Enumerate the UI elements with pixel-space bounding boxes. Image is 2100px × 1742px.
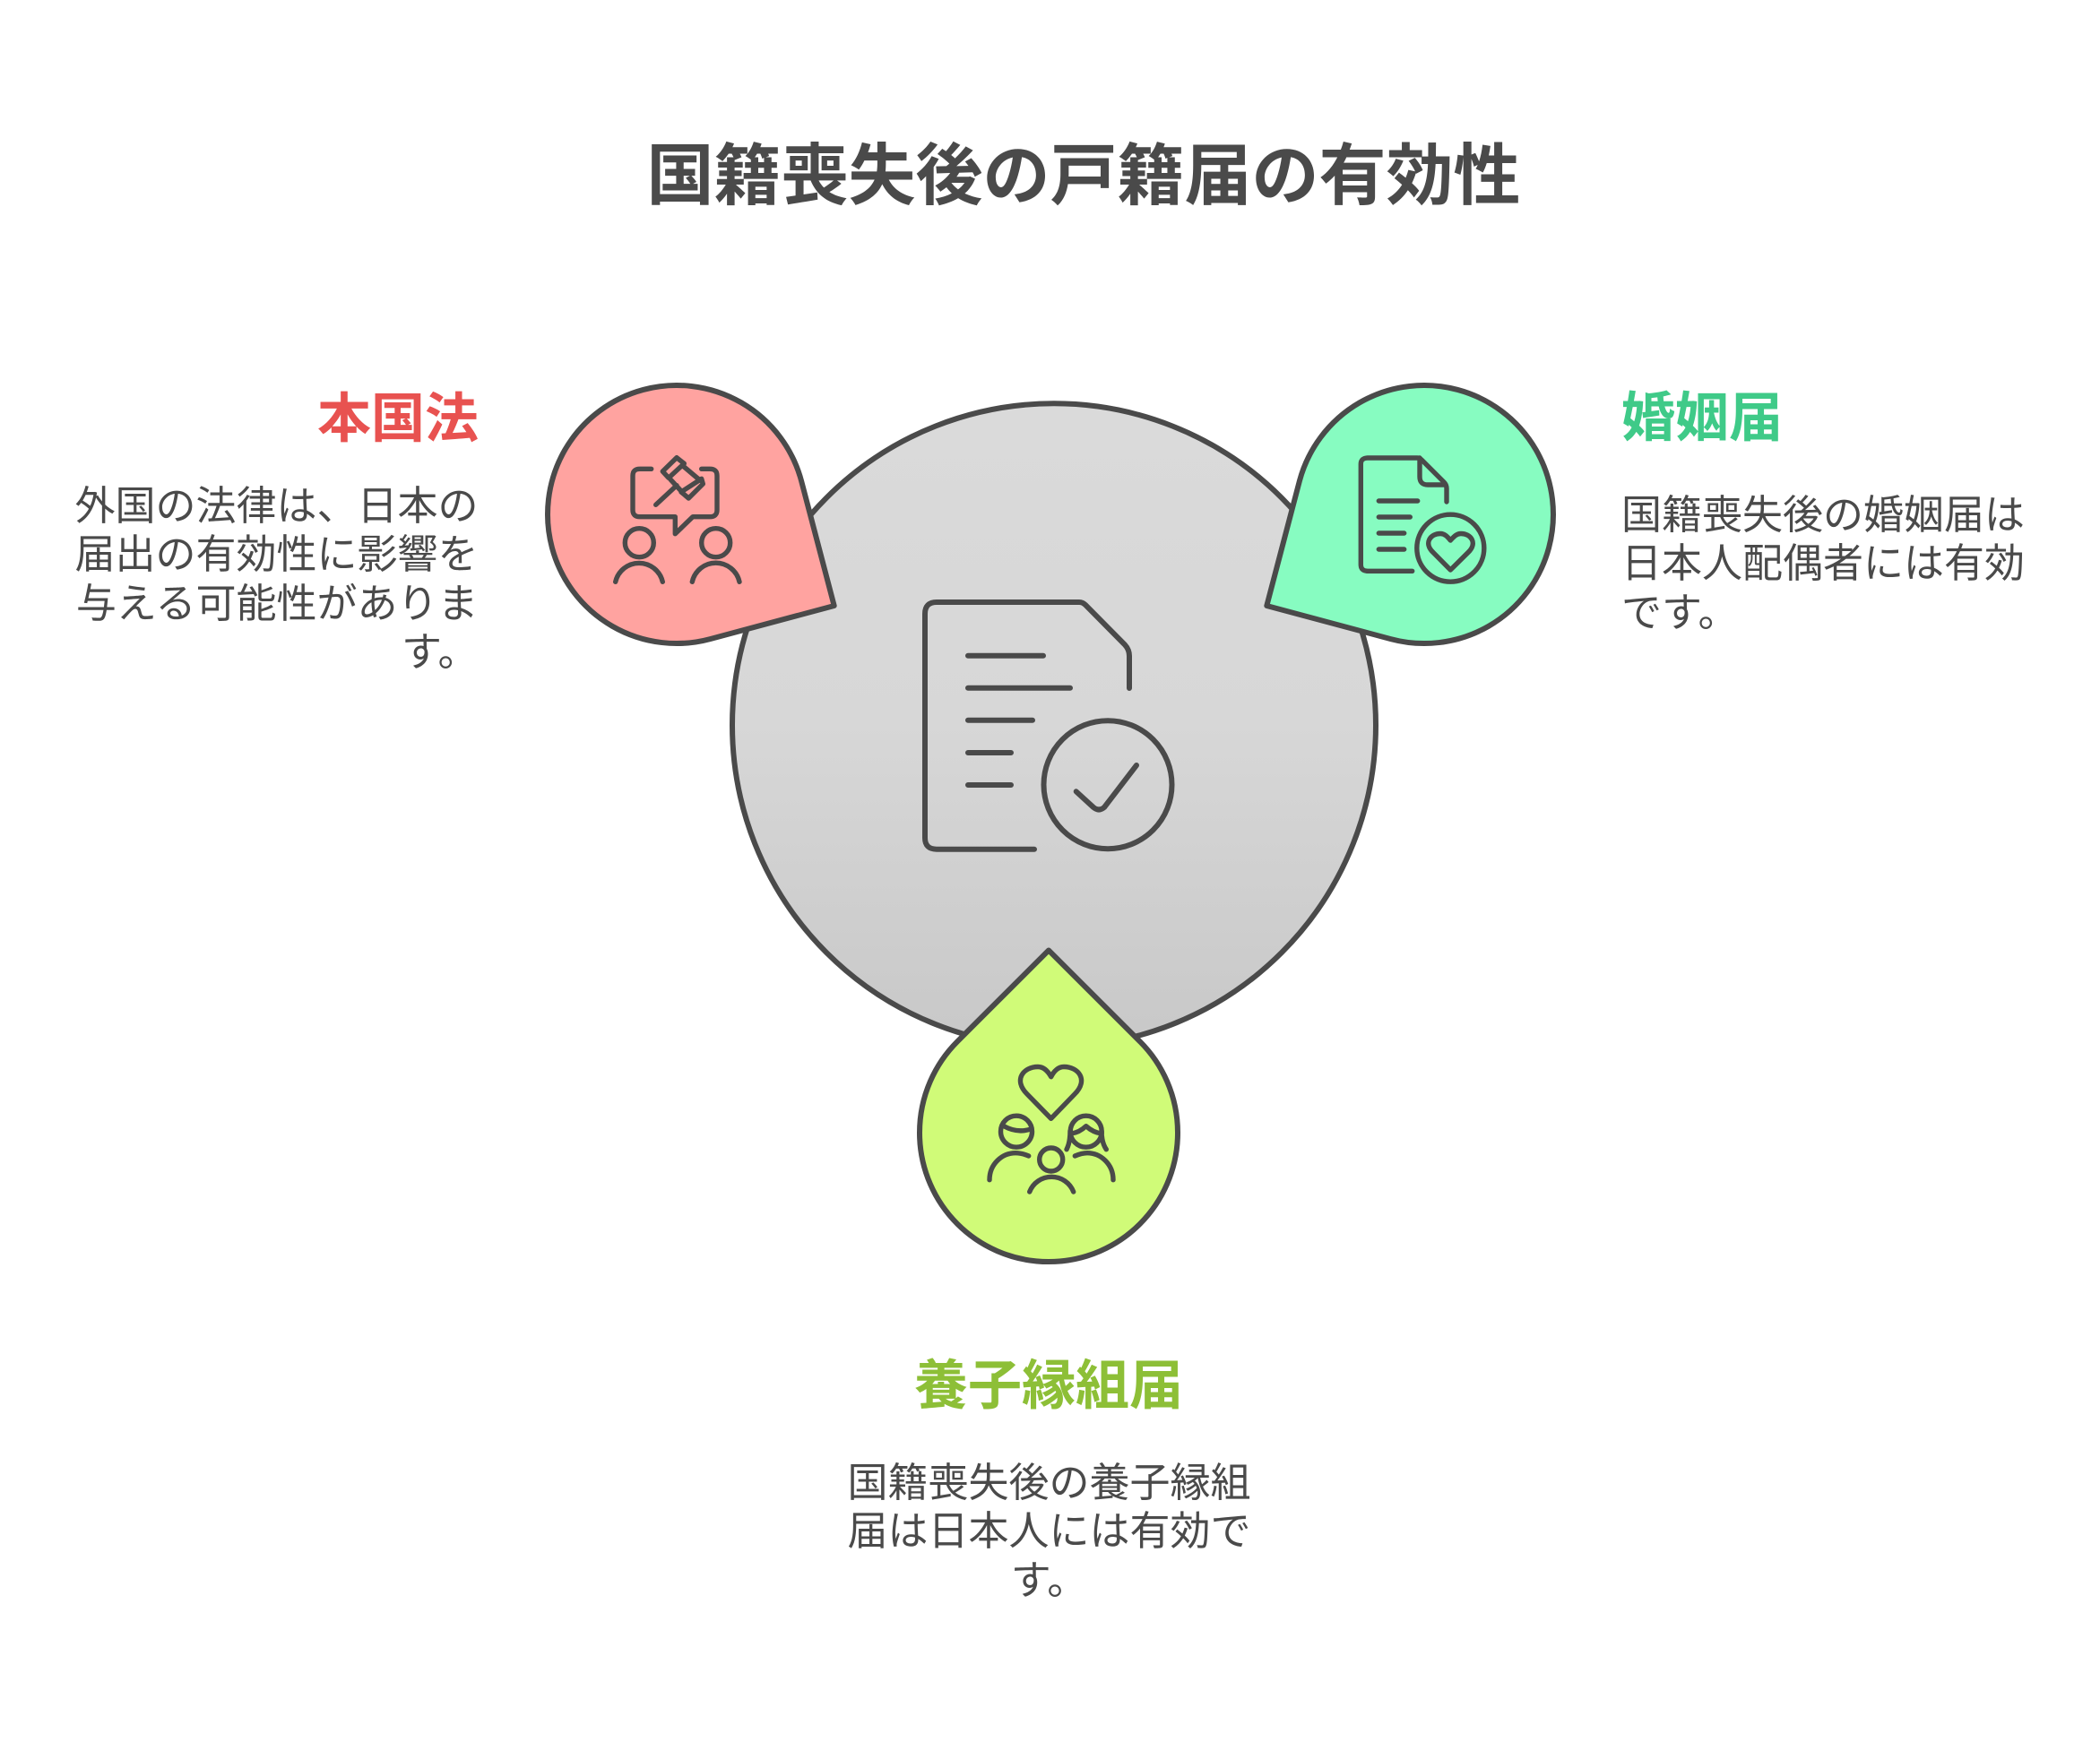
text block: 養子縁組届 description: 届は日本人には有効で bbox=[847, 1508, 1251, 1554]
text block: 婚姻届 description: 日本人配偶者には有効 bbox=[1621, 540, 2025, 586]
heading: 本国法: 本国法 bbox=[317, 389, 479, 449]
text block: 婚姻届 description: です。 bbox=[1621, 590, 1739, 635]
title: 国籍喪失後の戸籍届の有効性 bbox=[646, 138, 1521, 213]
heading: 婚姻届: 婚姻届 bbox=[1621, 388, 1783, 448]
icon: document with heart bbox=[1361, 458, 1484, 582]
icon: gavel speech bubble and two people bbox=[616, 458, 739, 582]
text block: 養子縁組届 description: す。 bbox=[1011, 1557, 1087, 1603]
text block: 本国法 description: す。 bbox=[402, 629, 479, 675]
heading: 養子縁組届: 養子縁組届 bbox=[914, 1356, 1183, 1416]
icon: document with check mark bbox=[925, 602, 1172, 849]
text block: 本国法 description: 与える可能性がありま bbox=[76, 581, 479, 626]
icon: family with heart bbox=[990, 1066, 1113, 1192]
text block: 本国法 description: 届出の有効性に影響を bbox=[74, 531, 479, 577]
text block: 本国法 description: 外国の法律は、日本の bbox=[74, 483, 479, 529]
text block: 養子縁組届 description bbox=[847, 1460, 1251, 1603]
text block: 婚姻届 description: 国籍喪失後の婚姻届は bbox=[1621, 492, 2025, 538]
panel: red teardrop bbox=[548, 385, 834, 643]
panel: lime teardrop bbox=[920, 950, 1178, 1262]
text block: 婚姻届 description bbox=[1621, 492, 2025, 635]
text block: 本国法 description bbox=[74, 483, 479, 675]
panel: green teardrop bbox=[1266, 385, 1553, 643]
central circle bbox=[732, 403, 1376, 1047]
text block: 養子縁組届 description: 国籍喪失後の養子縁組 bbox=[847, 1460, 1251, 1505]
